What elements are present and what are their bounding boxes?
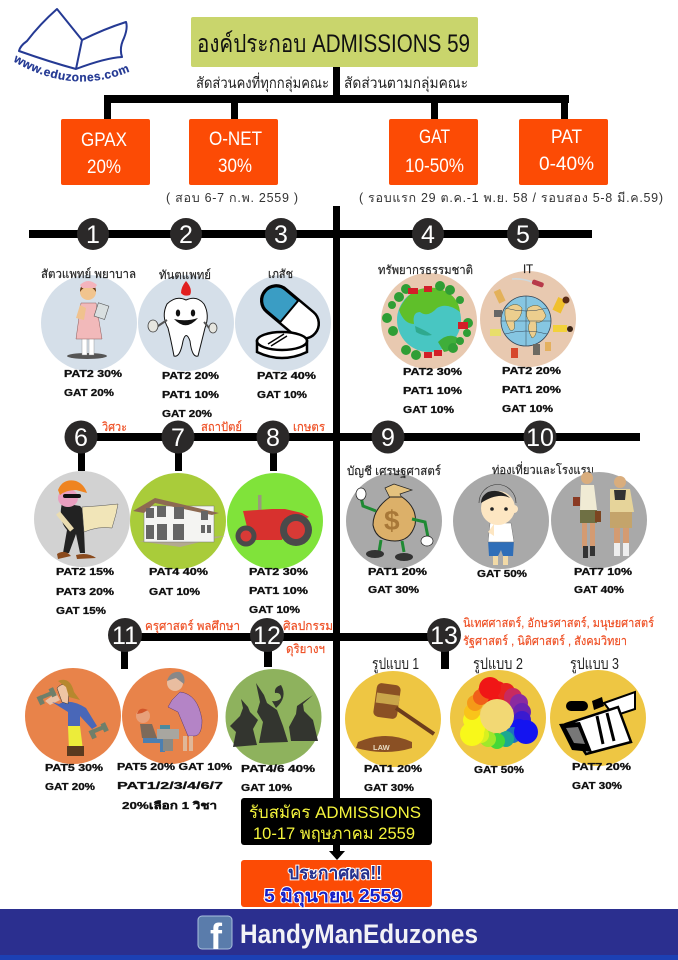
panel 11a: physical education [25,668,121,793]
weights [502,366,561,415]
weights [241,764,315,794]
label: สัตวแพทย์ พยาบาล [41,267,136,281]
weights: PAT2 20% [162,371,219,382]
weights: PAT1 20% [502,385,561,396]
title: องค์ประกอบ ADMISSIONS 59 [197,30,470,58]
weights [574,567,632,596]
icon: Thai dancers silhouette [230,683,318,747]
icon: money bag: $ [384,505,400,536]
note: O-NET exam date: ( สอบ 6-7 ก.พ. 2559 ) [166,191,298,205]
weights: GAT 20% [64,388,114,399]
weights: PAT2 20% [502,366,561,377]
panel 7: architecture [130,420,242,598]
number badges: 2 [179,221,193,249]
weights: PAT5 30% [45,763,103,774]
footer text: HandyManEduzones [240,919,478,949]
callout: admissions dates [241,798,432,845]
panel 10b: tourism, backpackers [551,472,647,596]
weights [149,567,208,598]
icon: nurse [67,281,109,359]
label: ทรัพยากรธรรมชาติ [378,263,473,277]
box: GPAX [61,119,150,185]
weights: PAT3 20% [56,587,114,598]
box: GAT: 10-50% [405,156,464,177]
callout: results announcement: ประกาศผล!! [288,863,382,883]
icon: gavel: LAW [373,743,391,752]
label: ศิลปกรรม [283,619,333,633]
number badges: 1 [86,221,100,249]
icon: facebook [198,916,232,957]
label: เภสัช [268,267,293,281]
weights [162,371,219,420]
weights: PAT1 10% [249,586,308,597]
callout: results announcement: 5 มิถุนายน 2559 [264,886,402,908]
weights: PAT1 10% [403,386,462,397]
label: education and physical education: ครุศาสตร์ พลศึกษา [145,619,240,634]
label: ทันตแพทย์ [159,268,211,282]
subheading: fixed proportion: สัดส่วนคงที่ทุกกลุ่มคณะ [196,72,329,93]
panel 10a: tourism, boy [453,461,594,580]
number badges: 11 [112,622,138,650]
label: รูปแบบ 2 [473,656,523,674]
icon: green earth [382,281,473,360]
weights [64,369,122,399]
icon: video camera [559,692,635,754]
weights: PAT2 30% [64,369,122,380]
weights [117,762,232,812]
box: O-NET [189,119,278,185]
panel 8: agriculture [227,420,326,616]
logo: eduzones [14,8,130,82]
box: O-NET: 30% [218,156,252,177]
box: GAT: GAT [419,127,450,148]
panel 12: fine arts and music [226,619,333,794]
icon: engineer with plan [57,480,118,559]
weights: 20%เลือก 1 วิชา [122,800,217,812]
label: IT [523,262,534,276]
panel 5: IT [480,262,576,415]
label: ดุริยางฯ [286,642,325,657]
weights: GAT 20% [45,782,95,793]
weights: GAT 40% [574,585,624,596]
label: faculty group 13 line 1: นิเทศศาสตร์, อักษรศาสตร์, มนุษยศาสตร์ [463,616,655,631]
label: faculty group 13 line 2: รัฐศาสตร์ , นิติศาสตร์ , สังคมวิทยา [463,634,627,648]
weights: GAT 50% [477,569,527,580]
callout: admissions dates: 10-17 พฤษภาคม 2559 [253,824,415,843]
icon: globe with children [490,279,573,358]
number badges: 7 [171,424,185,452]
icon: tooth [148,281,217,356]
label: บัญชี เศรษฐศาสตร์ [347,464,442,478]
box: GPAX: 20% [87,157,121,178]
weights: PAT4 40% [149,567,208,578]
subheading: by faculty group: สัดส่วนตามกลุ่มคณะ [344,75,468,93]
icon: colour ring [460,677,538,749]
weights: GAT 10% [249,605,300,616]
weights: GAT 10% [257,390,307,401]
weights: PAT2 30% [249,567,308,578]
panel 1: veterinary and nursing [41,267,137,399]
number badges: 8 [266,424,280,452]
weights: GAT 15% [56,606,106,617]
label: วิศวะ [102,420,127,434]
icon: tractor [236,495,312,546]
connector: main spine and branches [29,206,640,798]
title [191,17,478,67]
weights [368,567,427,596]
number badges: 9 [381,424,395,452]
number badges: 5 [516,221,530,249]
weights [56,567,114,617]
weights: GAT 10% [241,783,292,794]
weights: GAT 30% [364,783,414,794]
label: รูปแบบ 1 [372,656,419,674]
panel 13a: format 1 [345,656,441,794]
weights: GAT 10% [502,404,553,415]
weights: PAT2 40% [257,371,316,382]
icon: teacher and student [136,672,202,752]
weights: PAT1 20% [364,764,422,775]
icon: house [133,498,225,547]
weights: PAT7 20% [572,762,631,773]
icon: backpackers [573,472,634,558]
panel 13b: format 2 [450,656,546,776]
weights: PAT1 10% [162,390,219,401]
label: สถาปัตย์ [201,420,242,434]
weights [257,371,316,401]
box: PAT: 0-40% [539,154,594,175]
number badges [64,218,556,652]
weights: PAT2 15% [56,567,114,578]
weights: GAT 50% [474,765,524,776]
icon: greeting boy [479,484,518,565]
weights: PAT5 20% GAT 10% [117,762,232,773]
label: รูปแบบ 3 [570,656,619,674]
icon: capsule and pill box [255,279,325,358]
box: GPAX: GPAX [81,130,127,151]
box: PAT: PAT [551,127,582,148]
weights: PAT7 10% [574,567,632,578]
panel 11b: education [117,668,232,812]
weights: GAT 30% [368,585,419,596]
weights: GAT 10% [149,587,200,598]
callout: results announcement [241,860,432,908]
icon: facebook: f [210,916,223,957]
weights: PAT1/2/3/4/6/7 [117,781,224,792]
panel 6: engineering [34,420,130,617]
weights [403,367,462,416]
weights: GAT 30% [572,781,622,792]
number badges: 4 [421,221,435,249]
panel 13c: format 3 [550,656,646,792]
note: GAT PAT exam dates: ( รอบแรก 29 ต.ค.-1 พ.ย. 58 / รอบสอง 5-8 มี.ค.59) [359,191,663,205]
panel 2: dentistry [138,268,234,420]
label: ท่องเที่ยวและโรงแรม [492,461,594,477]
box: GAT [389,119,478,185]
icon: weightlifter [36,680,109,756]
arrow: to results [329,845,345,860]
weights: PAT1 20% [368,567,427,578]
box: PAT [519,119,608,185]
panel 3: pharmacy [235,267,331,401]
weights: GAT 10% [403,405,454,416]
number badges: 13 [430,622,458,650]
weights [364,764,422,794]
number badges: 10 [526,424,554,452]
label: เกษตร [293,420,326,434]
number badges: 6 [74,424,88,452]
panel 9: accounting and economics [346,464,442,596]
footer band [0,909,678,960]
weights [572,762,631,792]
weights: GAT 20% [162,409,212,420]
panel 4: natural resources [378,263,477,416]
logo: eduzones: www.eduzones.com [14,55,130,82]
weights: PAT2 30% [403,367,462,378]
weights: PAT4/6 40% [241,764,315,775]
callout: admissions dates: รับสมัคร ADMISSIONS [249,803,421,822]
connector: top tree [104,67,569,120]
weights [249,567,308,616]
weights [45,763,103,793]
number badges: 3 [274,221,288,249]
number badges: 12 [253,622,281,650]
box: O-NET: O-NET [209,129,262,150]
